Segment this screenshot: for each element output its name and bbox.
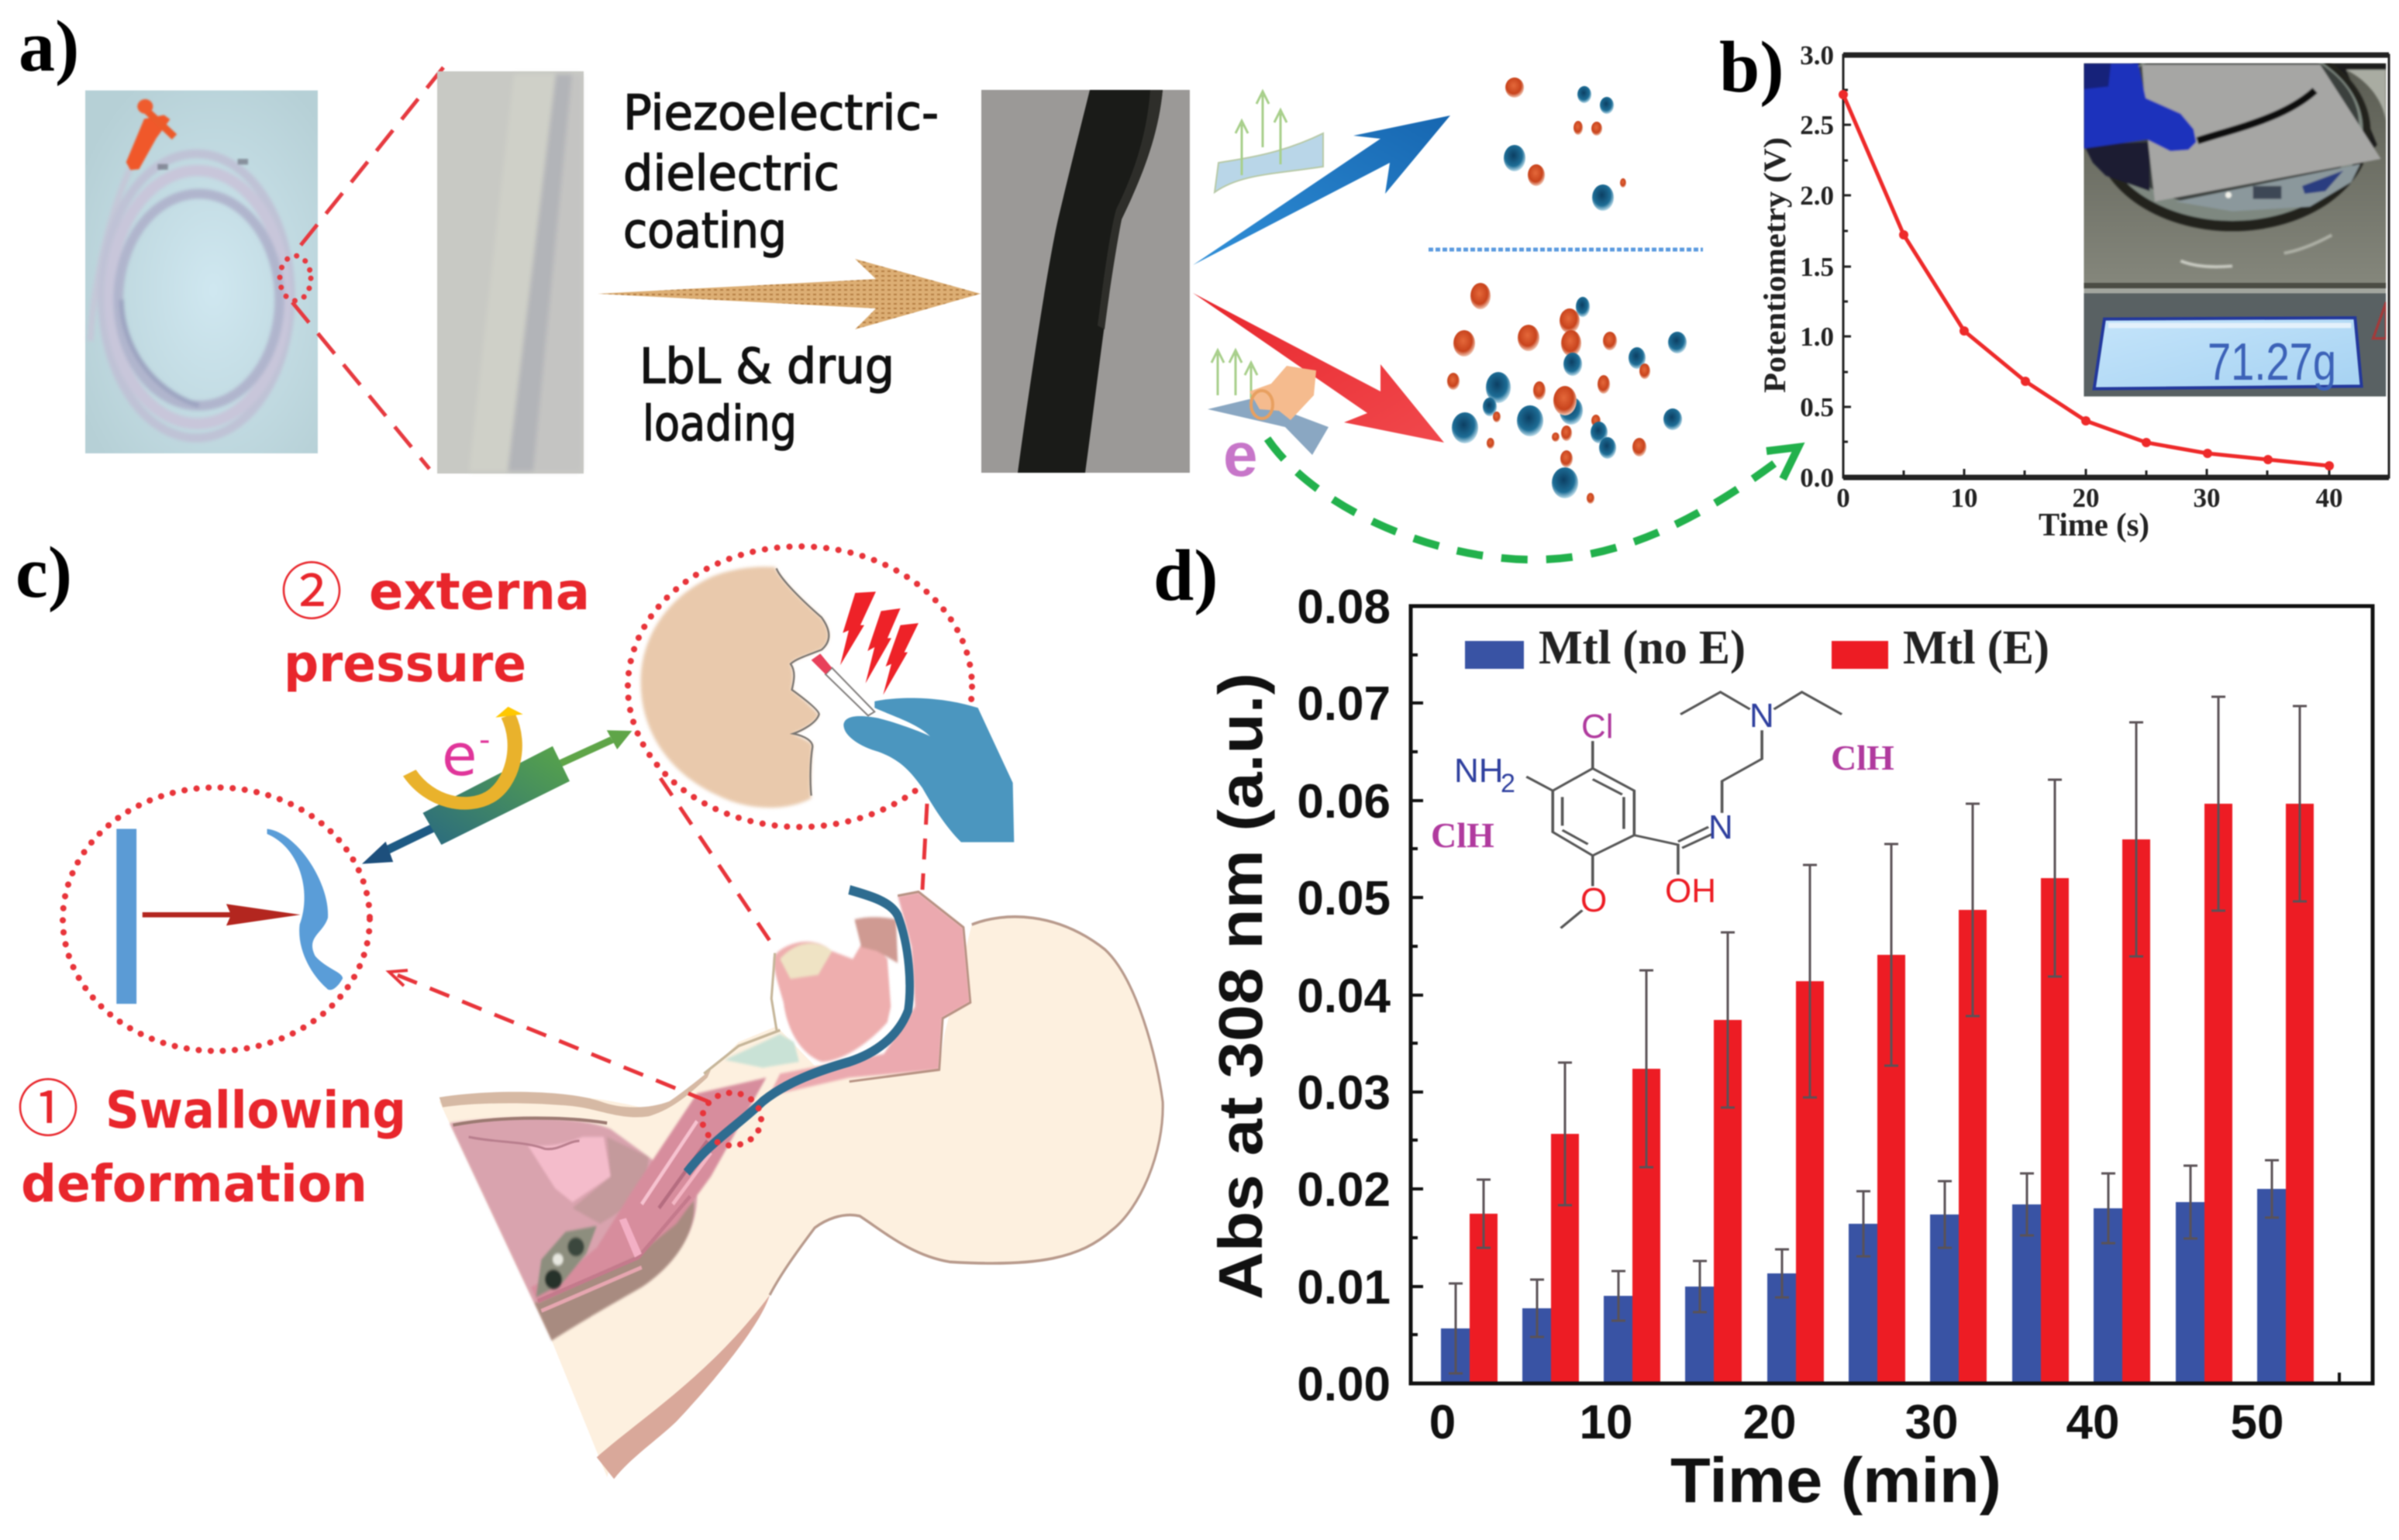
photo: uncoated tube close-up [437,71,584,474]
callout: deformation circle [63,787,370,1051]
chemical structure: metoclopramide: OH [1665,872,1716,910]
icon: relaxed film with arrows [1215,91,1323,192]
x axis tick labels: 30 [1905,1396,1958,1449]
icon: pressed film with hand [1208,350,1329,455]
divider: blue dotted line between release states [1429,248,1703,251]
panel d: absorbance bar chart [1153,536,2373,1516]
x axis tick labels: 10 [1950,483,1978,513]
feeding tube [687,890,910,1173]
y axis tick labels: 1.5 [1800,252,1834,282]
text: piezoelectric-dielectric coating: coating [623,202,787,259]
text: LbL and drug loading: loading [643,395,797,452]
y axis tick labels: 0.0 [1800,463,1834,493]
x axis tick labels: 0 [1429,1396,1456,1449]
x axis tick labels: 40 [2316,483,2342,513]
stomach contents [536,1226,597,1297]
callout: small dotted circle and dashed leaders [389,778,927,1146]
photo: coated black tube [981,90,1190,473]
x axis tick labels [1836,483,2342,513]
text: external pressure: externa [369,562,590,622]
text: external pressure: ② [281,543,343,632]
x axis tick labels: 30 [2194,483,2220,513]
chest cavity [450,1118,697,1341]
throat tissue [725,892,970,1101]
panel b: potentiometry chart [1719,27,2389,543]
panel c: swallowing and external pressure schematic [16,532,1163,1479]
x axis tick labels: 50 [2231,1396,2284,1449]
x axis tick labels: 20 [2073,483,2099,513]
chemical structure: metoclopramide: ClH [1431,815,1494,855]
illustration: head and neck cross-section [439,890,1163,1479]
x axis tick labels: 0 [1836,483,1850,513]
text: piezoelectric-dielectric coating: dielectric [623,145,839,202]
y axis tick labels: 0.08 [1297,581,1391,634]
chemical structure: metoclopramide: N [1749,697,1774,735]
feeding tip [619,1218,642,1258]
text: swallowing deformation: ① [17,1059,79,1149]
chart frame and ticks [1411,606,2373,1383]
y axis tick labels: 0.01 [1297,1261,1391,1314]
arrow: green dashed electrical signal arrow [1267,439,1798,560]
bars: Mtl E [1470,804,2314,1383]
x axis tick labels: 40 [2066,1396,2119,1449]
chemical structure: metoclopramide: Cl [1581,708,1614,746]
text: swallowing deformation: deformation [21,1154,367,1214]
label d): d) [1153,536,1218,616]
line series: potential decay [1839,90,2334,470]
text: LbL and drug loading: LbL & drug [639,338,894,394]
callout: face and nose tube circle [628,546,1014,842]
y axis tick labels: 0.04 [1297,970,1391,1023]
arrow: red enhanced release path [1193,293,1444,443]
legend: Mtl (E) [1903,622,2049,674]
text: external pressure [281,543,590,694]
y axis tick labels [1297,581,1391,1411]
text: electron charge label: e [442,722,477,789]
label c): c) [16,532,72,613]
y axis title: Potentiometry (V) [1757,137,1792,393]
y axis tick labels: 0.06 [1297,775,1391,829]
photo: coiled feeding tube [85,91,318,453]
label b): b) [1719,27,1784,108]
x axis title: Time (min) [1670,1445,2001,1516]
panel a: tube coating and drug release [19,6,1798,560]
text: electron charge label: - [479,722,490,758]
chart frame and ticks [1843,55,2389,477]
y axis tick labels [1800,40,1834,493]
y axis tick labels: 2.0 [1800,181,1834,211]
x axis tick labels: 20 [1743,1396,1796,1449]
legend: Mtl (no E) [1539,622,1746,674]
head silhouette [439,917,1163,1477]
legend [1465,622,2049,674]
text: swallowing deformation: Swallowing [105,1080,406,1140]
x axis tick labels [1429,1396,2284,1449]
particles: enhanced release [1447,283,1687,504]
y axis tick labels: 1.0 [1800,322,1834,352]
y axis tick labels: 0.07 [1297,677,1391,731]
y axis tick labels: 0.03 [1297,1066,1391,1120]
y axis tick labels: 3.0 [1800,40,1834,71]
chemical structure: metoclopramide: O [1580,881,1607,919]
y axis tick labels: 0.05 [1297,872,1391,925]
chemical structure: metoclopramide: NH [1454,752,1504,790]
y axis tick labels: 0.5 [1800,392,1834,422]
chemical structure: metoclopramide: 2 [1501,769,1515,798]
error bars [1449,697,2307,1373]
esophagus band [531,1077,767,1303]
y axis title: Abs at 308 nm (a.u.) [1206,673,1275,1300]
neck shadow [597,1295,770,1479]
scale readout: 71.27g [2208,332,2336,391]
arrow: blue release path [1193,115,1450,265]
arrow: textured process arrow [598,259,981,329]
text: external pressure: pressure [284,634,526,694]
photo inset: tube on scale [2084,33,2386,397]
y axis tick labels: 2.5 [1800,110,1834,140]
chemical structure: metoclopramide [1431,692,1894,928]
callout: dashed zoom lines from coil to tube close-up [280,67,443,469]
particles: low release [1504,78,1626,211]
bars: Mtl no E [1441,1189,2286,1383]
x axis tick labels: 10 [1580,1396,1632,1449]
icon: electron symbol: e [1223,420,1257,489]
y axis tick labels: 0.00 [1297,1358,1391,1411]
x axis title: Time (s) [2039,508,2149,543]
collar band [439,1070,711,1117]
text: LbL and drug loading [639,338,894,452]
chemical structure: metoclopramide: N [1708,808,1733,846]
label a): a) [19,6,79,87]
text: swallowing deformation [17,1059,406,1214]
text: piezoelectric-dielectric coating: Piezoelectric- [623,84,939,141]
arrow: double-headed electrode connector [362,707,632,864]
text: piezoelectric-dielectric coating [623,84,939,259]
y axis tick labels: 0.02 [1297,1163,1391,1217]
head outline [770,917,1163,1295]
chemical structure: metoclopramide: ClH [1831,738,1894,777]
